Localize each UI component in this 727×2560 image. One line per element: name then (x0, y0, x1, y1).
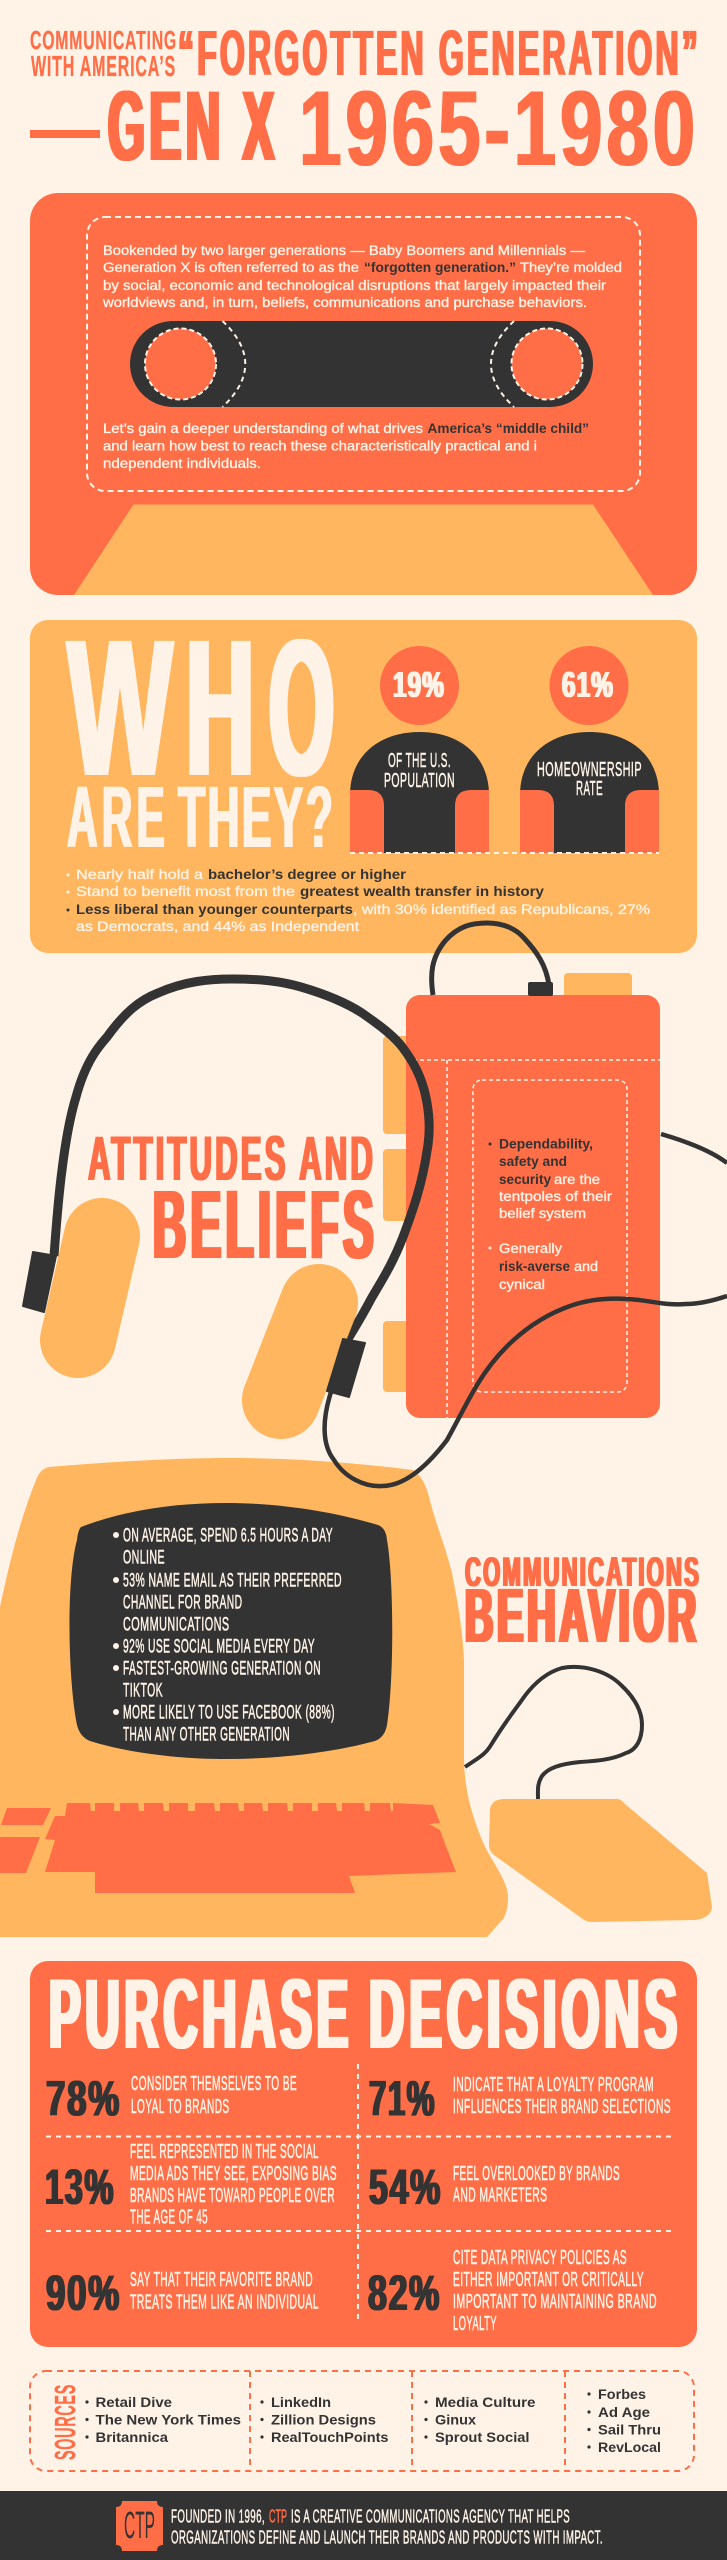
title: COMMUNICATING (30, 25, 177, 55)
intro text: Generation X is often referred to as the (103, 260, 359, 275)
stat: 82% (368, 2246, 657, 2335)
intro text: Let’s gain a deeper understanding of what drives (103, 421, 423, 436)
stat figure: 19% of population: 19% (393, 664, 445, 705)
stat: 78% (46, 2070, 297, 2126)
stat: 71% (369, 2070, 671, 2126)
walkman side tabs (383, 973, 632, 1392)
screen bullet list: FASTEST-GROWING GENERATION ON (123, 1658, 321, 1680)
beliefs bullet list: security (499, 1172, 551, 1187)
screen bullet list: ON AVERAGE, SPEND 6.5 HOURS A DAY (123, 1525, 333, 1547)
heading: who are they: W (67, 599, 173, 817)
title: GEN X (108, 70, 279, 181)
intro text: America’s “middle child” (428, 421, 589, 436)
who bullet list: Less liberal than younger counterparts (76, 902, 353, 917)
screen bullet list: COMMUNICATIONS (123, 1614, 230, 1636)
who bullet list (66, 867, 650, 934)
beliefs bullet list (488, 1136, 613, 1292)
intro text: They’re molded (520, 260, 622, 275)
screen bullet list: 92% USE SOCIAL MEDIA EVERY DAY (123, 1636, 315, 1658)
intro text: “forgotten generation.” (364, 260, 516, 275)
screen bullet list: ONLINE (123, 1547, 165, 1569)
stat: 13%: THE AGE OF 45 (130, 2206, 208, 2228)
stat figure: 19% of population: POPULATION (384, 770, 455, 792)
sources column 4: Sail Thru (598, 2422, 661, 2438)
heading: who are they: ARE (67, 769, 169, 866)
stat: 54% (369, 2159, 620, 2215)
stat: 90%: TREATS THEM LIKE AN INDIVIDUAL (130, 2290, 319, 2314)
stat: 78%: 78% (46, 2070, 121, 2126)
heading: who are they (67, 599, 335, 866)
sources column 3: Media Culture (435, 2395, 536, 2410)
stat: 13%: 13% (45, 2159, 115, 2215)
heading: who are they: THEY? (178, 769, 335, 866)
panel: purchase decisions: MEDIA ADS THEY SEE, EXPOSING BIAS (130, 2162, 337, 2185)
panel: who are they: O (269, 599, 334, 817)
intro text: and learn how best to reach these characteristically practical and i (103, 438, 537, 454)
panel: cassette tape intro (30, 193, 697, 595)
stat: 82%: 82% (368, 2265, 441, 2321)
beliefs bullet list: Generally (499, 1241, 562, 1256)
sources column 2: Zillion Designs (271, 2412, 376, 2428)
infographic canvas: ATTITUDES AND (88, 1124, 376, 1194)
monitor screen (69, 1503, 392, 1759)
sources column 3: Ginux (435, 2412, 477, 2428)
heading: attitudes and beliefs (88, 1124, 378, 1279)
stat figure: 61% homeownership (520, 646, 659, 853)
sources column 3 (424, 2395, 536, 2445)
stat: 90% (46, 2265, 319, 2321)
headphones (23, 979, 429, 1400)
who bullet list: Stand to benefit most from the (76, 884, 295, 899)
intro text (102, 243, 622, 471)
screen bullet list: 53% NAME EMAIL AS THEIR PREFERRED (123, 1570, 342, 1592)
heading: purchase decisions: PURCHASE (49, 1958, 353, 2069)
sources column 2: LinkedIn (271, 2395, 331, 2410)
stat figure: 61% homeownership: RATE (576, 778, 603, 800)
infographic canvas: BELIEFS (153, 1170, 378, 1279)
screen bullet list: MORE LIKELY TO USE FACEBOOK (88%) (123, 1702, 335, 1724)
screen bullet list: CHANNEL FOR BRAND (123, 1592, 242, 1614)
panel: purchase decisions: BRANDS HAVE TOWARD PEOPLE OVER (130, 2184, 335, 2207)
stat: 13% (45, 2140, 337, 2228)
beliefs bullet list: tentpoles of their (499, 1189, 613, 1204)
sources column 1 (85, 2395, 241, 2445)
keyboard (0, 1803, 456, 1893)
sources column 1: Britannica (96, 2430, 169, 2445)
stat: 54%: 54% (369, 2159, 442, 2215)
beliefs bullet list: cynical (499, 1277, 545, 1292)
footer text: CTP (269, 2505, 287, 2526)
stat: 71%: 71% (369, 2070, 436, 2126)
panel: sources: SOURCES (50, 2384, 82, 2460)
sources column 2: RealTouchPoints (271, 2430, 388, 2445)
intro text: by social, economic and technological disruptions that largely impacted their (103, 278, 607, 293)
panel: sources (30, 2371, 694, 2471)
heading: who are they: H (186, 599, 254, 817)
computer mouse and cord (465, 1667, 712, 1922)
sources column 4: RevLocal (598, 2440, 661, 2455)
who bullet list: Nearly half hold a (76, 867, 204, 882)
panel: computer monitor (0, 1458, 508, 1937)
footer (0, 2491, 727, 2560)
title (30, 17, 701, 188)
sources column 4 (587, 2387, 661, 2455)
beliefs bullet list: safety and (499, 1154, 567, 1169)
sources column 2 (260, 2395, 388, 2445)
headphone cord (325, 1296, 727, 1486)
beliefs bullet list: and (574, 1259, 598, 1274)
who bullet list: bachelor’s degree or higher (208, 867, 407, 882)
beliefs bullet list: belief system (499, 1206, 586, 1221)
who bullet list: , with 30% identified as Republicans, 27% (353, 902, 650, 917)
screen bullet list: THAN ANY OTHER GENERATION (123, 1724, 290, 1746)
stat: 13%: FEEL REPRESENTED IN THE SOCIAL (130, 2140, 319, 2163)
beliefs bullet list: are the (554, 1172, 600, 1187)
CTP logo: CTP (124, 2505, 155, 2547)
stat figure: 19% of population: OF THE U.S. (388, 750, 451, 772)
who bullet list: as Democrats, and 44% as Independent (76, 919, 359, 934)
beliefs bullet list: Dependability, (499, 1136, 593, 1152)
stat: 82%: LOYALTY (453, 2312, 497, 2335)
intro text: ndependent individuals. (103, 456, 261, 471)
sources column 1: Retail Dive (96, 2395, 173, 2410)
stat figure: 61% homeownership: HOMEOWNERSHIP (537, 759, 642, 781)
beliefs bullet list: risk-averse (499, 1259, 570, 1274)
stat: 90%: SAY THAT THEIR FAVORITE BRAND (130, 2268, 313, 2291)
panel: walkman (406, 995, 660, 1418)
sources column 3: Sprout Social (435, 2430, 530, 2445)
panel: purchase decisions: CONSIDER THEMSELVES TO BE (131, 2072, 297, 2095)
footer text: FOUNDED IN 1996, (171, 2505, 265, 2526)
stat: 54%: AND MARKETERS (453, 2184, 548, 2206)
screen bullet list: TIKTOK (123, 1680, 163, 1702)
sources column 4: Forbes (598, 2387, 646, 2402)
sources column 4: Ad Age (598, 2405, 651, 2420)
footer text (171, 2505, 603, 2547)
screen bullet list (113, 1525, 342, 1746)
cassette window (130, 321, 593, 407)
stat figure: 61% homeownership: 61% (562, 664, 614, 705)
panel: who are they (30, 599, 697, 953)
CTP logo (116, 2501, 163, 2551)
walkman cord loop and jack (432, 923, 553, 996)
stat figure: 19% of population (350, 646, 489, 853)
intro text: worldviews and, in turn, beliefs, communications and purchase behaviors. (102, 295, 587, 310)
who bullet list: greatest wealth transfer in history (300, 884, 545, 899)
walkman right cord (661, 1134, 727, 1163)
intro text: Bookended by two larger generations — Baby Boomers and Millennials — (103, 243, 586, 258)
stat: 78%: LOYAL TO BRANDS (131, 2095, 230, 2118)
title: WITH AMERICA’S (31, 51, 176, 83)
stat: 90%: 90% (46, 2265, 121, 2321)
panel: purchase decisions (30, 1958, 697, 2347)
sources column 1: The New York Times (96, 2412, 241, 2428)
